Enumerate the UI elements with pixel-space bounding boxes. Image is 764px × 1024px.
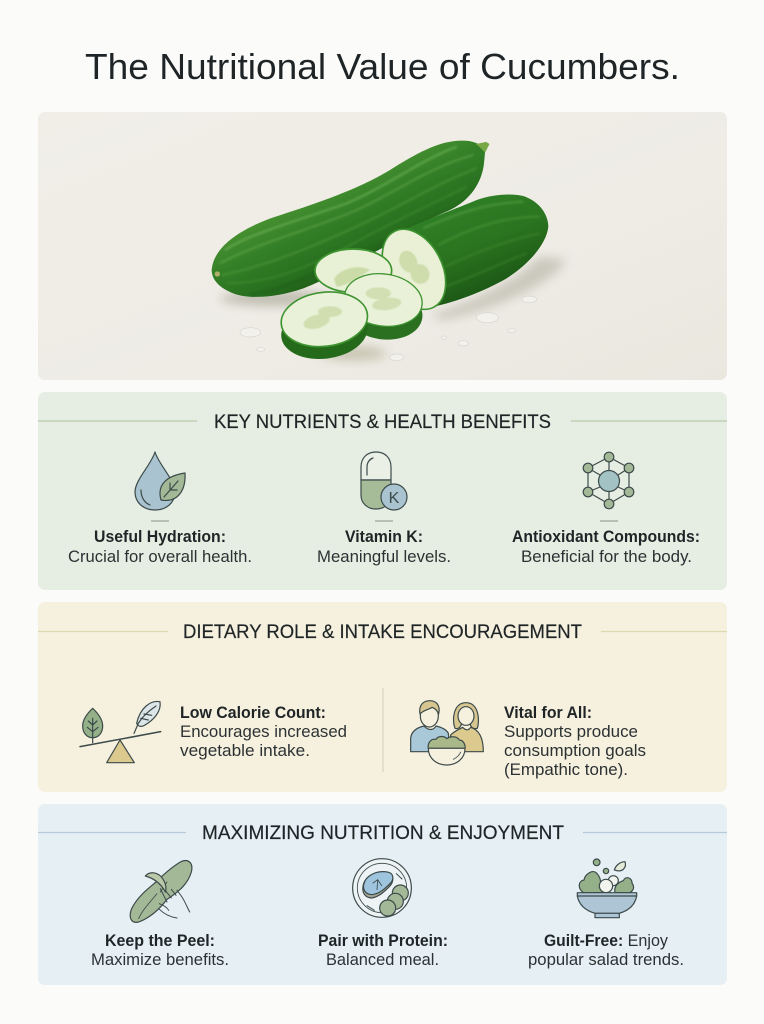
icon: peeling cucumber by hand [130, 861, 192, 922]
text: low calorie count [180, 704, 347, 760]
heading: key nutrients: KEY NUTRIENTS & HEALTH BENEFITS [214, 411, 551, 433]
text: antioxidant compounds: Antioxidant Compounds: [512, 528, 700, 546]
panel: dietary role and intake encouragement [38, 602, 727, 792]
text: keep the peel: Maximize benefits. [91, 950, 229, 969]
text: low calorie count: Low Calorie Count: [180, 704, 326, 722]
text: vital for all [504, 704, 646, 779]
text: useful hydration: Crucial for overall health. [68, 547, 252, 566]
icon: vitamin K capsule [361, 452, 407, 510]
icon: balance with leaf and feather [80, 701, 161, 763]
icon: plate with protein and cucumber [353, 859, 411, 917]
text: keep the peel: Keep the Peel: [105, 932, 215, 950]
text: guilt-free: Guilt-Free: Enjoy [544, 931, 668, 950]
text: guilt-free [528, 931, 684, 969]
text: vital for all: Supports produce [504, 722, 638, 741]
middle slice [341, 281, 426, 345]
heading: maximizing nutrition: MAXIMIZING NUTRITION & ENJOYMENT [202, 822, 564, 844]
front slice [278, 300, 371, 364]
text: antioxidant compounds: Beneficial for the body. [521, 547, 692, 566]
text: pair with protein [318, 932, 448, 969]
cut face [369, 219, 459, 320]
title: The Nutritional Value of Cucumbers. [85, 46, 680, 87]
icon: antioxidant molecule [583, 452, 634, 509]
text: vitamin K [317, 528, 451, 566]
long cucumber [212, 141, 489, 297]
panel: cucumber photo [38, 112, 727, 380]
text: low calorie count: Encourages increased [180, 722, 347, 741]
text: pair with protein: Pair with Protein: [318, 932, 448, 950]
icon: two people with salad bowl [411, 701, 483, 765]
text: vital for all: Vital for All: [504, 704, 592, 722]
panel: key nutrients and health benefits [38, 392, 727, 590]
text: useful hydration [68, 528, 252, 566]
text: vitamin K: Meaningful levels. [317, 547, 451, 566]
heading: dietary role: DIETARY ROLE & INTAKE ENCOURAGEMENT [183, 621, 582, 643]
water droplets [240, 296, 537, 361]
illustration: cucumbers and slices [212, 141, 567, 364]
text: antioxidant compounds [512, 528, 700, 566]
icon: salad bowl [577, 859, 637, 918]
text: low calorie count: vegetable intake. [180, 741, 310, 760]
text: guilt-free: popular salad trends. [528, 950, 684, 969]
text: keep the peel [91, 932, 229, 969]
text: vital for all: consumption goals [504, 741, 646, 760]
panel: maximizing nutrition and enjoyment [38, 804, 727, 985]
text: useful hydration: Useful Hydration: [94, 528, 226, 546]
back slice [315, 249, 392, 292]
text: pair with protein: Balanced meal. [326, 950, 439, 969]
icon: vitamin K capsule: K [389, 490, 400, 507]
icon: water drop with leaf [135, 452, 185, 510]
text: vitamin K: Vitamin K: [345, 528, 423, 546]
right cucumber body [403, 194, 548, 308]
text: vital for all: (Empathic tone). [504, 760, 628, 779]
